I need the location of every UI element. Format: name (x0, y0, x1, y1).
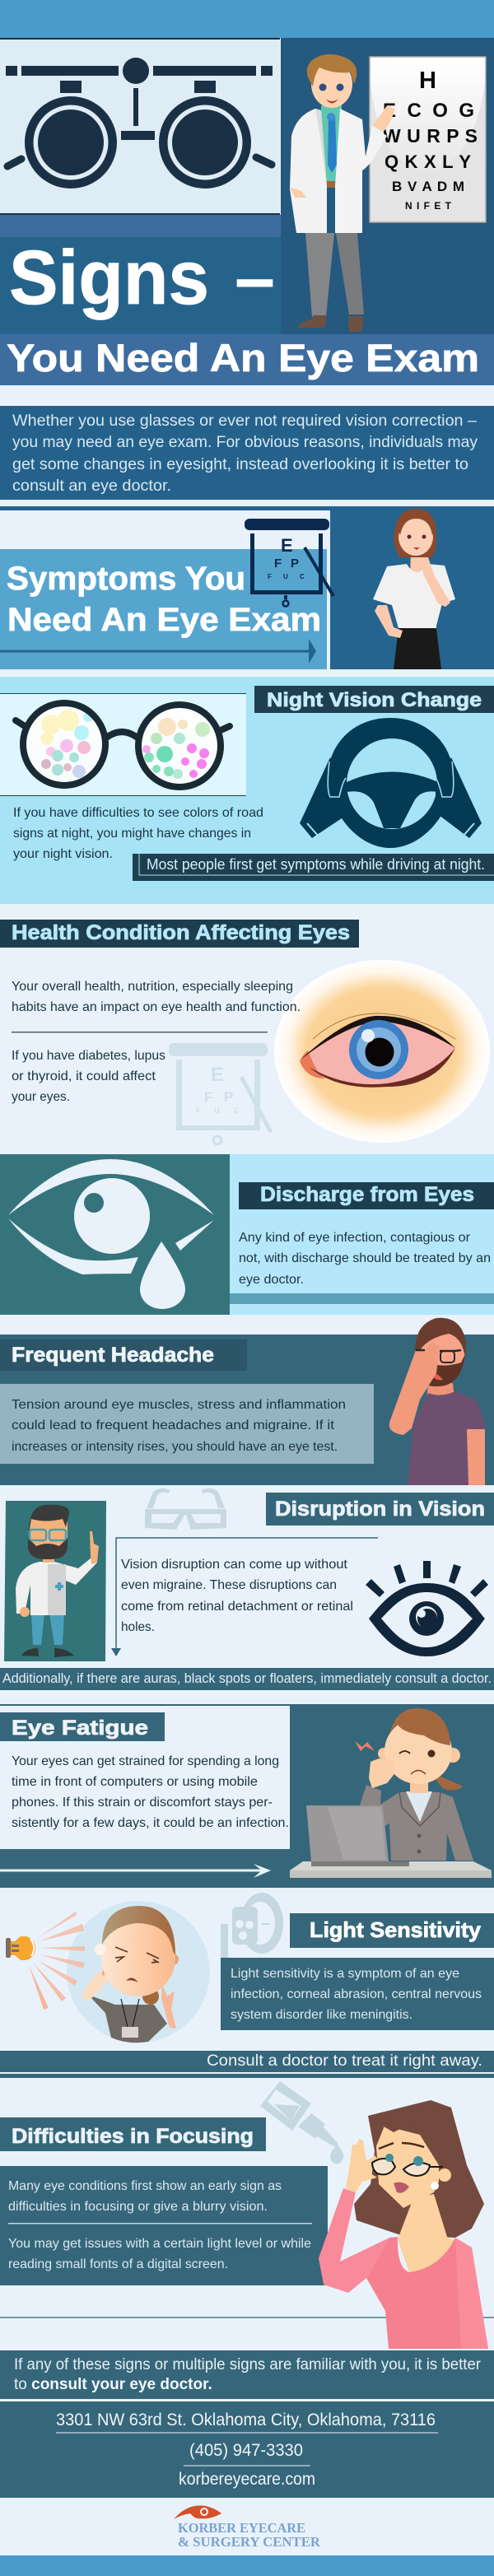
illustration: worried woman (373, 509, 455, 669)
heading text: Need An Eye Exam (7, 602, 321, 638)
body text: your night vision. (13, 847, 113, 861)
icon: eye chart: N I F E T (405, 200, 452, 212)
text block: holes. (121, 1620, 155, 1634)
heading (0, 2117, 266, 2151)
illustration: man with headache (389, 1318, 485, 1485)
panel: health condition (0, 920, 490, 1144)
heading: Difficulties in Focusing (12, 2125, 254, 2148)
text block: Your overall health, nutrition, especially sleeping (12, 980, 293, 994)
illustration: woman squinting at lamp (6, 1901, 210, 2043)
illustration: doctor with beard (4, 1501, 106, 1661)
icon: eye chart: Q K X L Y (384, 151, 471, 172)
icon: eye with lashes (366, 1561, 488, 1656)
text block: Any kind of eye infection, contagious or (239, 1231, 471, 1245)
icon: chart with pointer (245, 519, 333, 606)
intro text (0, 406, 494, 500)
icon: eye chart: H (419, 68, 436, 94)
text block: Tension around eye muscles, stress and inflammation (12, 1398, 346, 1412)
text block: habits have an impact on eye health and function. (12, 1000, 301, 1014)
panel: frequent headache (0, 1318, 494, 1485)
heading text: Symptoms You (7, 561, 245, 597)
intro text: get some changes in eyesight, instead overlooking it is better to (12, 455, 468, 473)
arrow (0, 1864, 271, 1878)
logo: KORBER EYECARE (178, 2520, 305, 2536)
text block: could lead to frequent headaches and migraine. If it (12, 1418, 335, 1432)
text block: or thyroid, it could affect (12, 1069, 156, 1083)
panel: closing message: to consult your eye doctor. (14, 2376, 212, 2393)
intro text: Whether you use glasses or ever not required vision correction – (12, 412, 477, 430)
icon: chart watermark: U (214, 1106, 219, 1115)
panel: discharge from eyes (0, 1154, 494, 1315)
panel: night vision change (0, 669, 494, 904)
illustration: woman at laptop (290, 1708, 492, 1878)
icon: chart with pointer: F (274, 557, 282, 571)
heading: Disruption in Vision (275, 1498, 485, 1521)
panel: closing message: If any of these signs or multiple signs are familiar with you, it is better (14, 2356, 482, 2373)
heading (266, 1493, 494, 1526)
callout band (0, 2051, 494, 2078)
intro text: consult an eye doctor. (12, 477, 171, 495)
arrow (0, 639, 316, 664)
heading text (7, 561, 321, 638)
text block: your eyes. (12, 1090, 70, 1104)
heading: Frequent Headache (12, 1344, 214, 1367)
text block: system disorder like meningitis. (231, 2008, 412, 2022)
text block: Your eyes can get strained for spending a long (12, 1754, 279, 1768)
panel: closing message (0, 2350, 494, 2399)
icon: chart watermark: F (196, 1106, 201, 1115)
text block: come from retinal detachment or retinal (121, 1600, 353, 1614)
panel: glasses background (0, 693, 246, 796)
text block: phones. If this strain or discomfort stays per- (12, 1796, 273, 1810)
bottom band (0, 2555, 494, 2576)
text block (12, 1754, 289, 1830)
heading: Light Sensitivity (310, 1917, 482, 1942)
text block: even migraine. These disruptions can (121, 1578, 337, 1592)
panel: disruption in vision (0, 1488, 494, 1690)
body text: If you have difficulties to see colors of road (13, 806, 263, 820)
icon: eye exam watermark (221, 1893, 283, 1958)
text block: Light sensitivity is a symptom of an eye (231, 1967, 459, 1981)
icon: eye chart: B V A D M (392, 179, 464, 194)
icon: chart with pointer: C (300, 573, 305, 580)
panel: contact details: (405) 947-3330 (189, 2441, 303, 2460)
heading: Health Condition Affecting Eyes (12, 921, 350, 944)
text block: reading small fonts of a digital screen. (8, 2257, 228, 2271)
icon: eye chart: W U R P S (383, 125, 478, 147)
callout: Most people first get symptoms while driving at night. (147, 856, 485, 873)
text block (0, 2166, 328, 2285)
illustration: woman with glasses (319, 2100, 488, 2349)
panel: hero header (0, 38, 494, 334)
heading: Eye Fatigue (12, 1717, 148, 1740)
panel: contact details (0, 2401, 494, 2498)
title band: You Need An Eye Exam (7, 336, 479, 380)
heading (290, 1913, 494, 1948)
icon: steering wheel with hands (300, 718, 482, 848)
icon: trial lens frame (6, 58, 273, 189)
icon: tearing eye (8, 1159, 214, 1309)
text block: eye doctor. (239, 1273, 304, 1287)
panel: eye fatigue (0, 1704, 494, 1888)
text block: You may get issues with a certain light level or while (8, 2237, 311, 2251)
text block: increases or intensity rises, you should have an eye test. (12, 1440, 338, 1454)
icon: chart watermark (169, 1043, 271, 1144)
heading: Night Vision Change (267, 689, 482, 711)
icon: chart with pointer: U (283, 573, 288, 580)
callout (133, 854, 494, 881)
heading (0, 1712, 165, 1741)
text block (0, 1384, 374, 1464)
icon: chart watermark: F (204, 1089, 212, 1105)
icon: eye chart: E C O G (383, 100, 474, 122)
title: Signs: Signs (9, 235, 209, 320)
text block: not, with discharge should be treated by an (239, 1251, 491, 1265)
icon: eye dropper watermark (260, 2081, 343, 2164)
body text (13, 806, 263, 861)
heading (254, 686, 494, 713)
icon: chart with pointer: E (281, 535, 293, 556)
text block: difficulties in focusing or give a blurry vision. (8, 2200, 268, 2214)
panel: difficulties in focusing (0, 2081, 494, 2349)
text block (239, 1231, 491, 1287)
heading: Discharge from Eyes (260, 1183, 474, 1206)
arrow: down (111, 1538, 378, 1656)
intro text: you may need an eye exam. For obvious reasons, individuals may (12, 433, 478, 451)
text block (121, 1558, 353, 1634)
text block: infection, corneal abrasion, central nervous (231, 1987, 482, 2001)
icon: chart watermark: P (224, 1089, 233, 1105)
icon: chart with pointer: F (268, 573, 272, 580)
panel: contact details: 3301 NW 63rd St. Oklahoma City, Oklahoma, 73116 (56, 2411, 436, 2429)
panel: contact details: korbereyecare.com (179, 2470, 315, 2489)
illustration: doctor (290, 54, 395, 332)
text block: Many eye conditions first show an early sign as (8, 2179, 282, 2193)
body text: signs at night, you might have changes in (13, 827, 251, 841)
panel: symptoms heading (0, 500, 494, 669)
logo (174, 2505, 321, 2550)
heading (0, 1339, 247, 1371)
icon: chart watermark: C (234, 1106, 240, 1115)
text block (12, 980, 301, 1104)
callout band: Consult a doctor to treat it right away. (207, 2052, 482, 2070)
icon: eye chart (370, 57, 486, 222)
panel: light sensitivity (0, 1893, 494, 2078)
text block: If you have diabetes, lupus (12, 1049, 165, 1063)
text block: Vision disruption can come up without (121, 1558, 348, 1572)
icon: chart with pointer: P (291, 557, 299, 571)
logo: & SURGERY CENTER (178, 2534, 321, 2550)
illustration: red eye (274, 960, 490, 1143)
icon: colorblind glasses (16, 703, 230, 787)
heading (239, 1182, 494, 1209)
top band (0, 0, 494, 38)
icon: glasses watermark (145, 1488, 226, 1530)
text block (221, 1958, 494, 2030)
text block: time in front of computers or using mobile (12, 1775, 258, 1789)
icon: chart watermark: E (211, 1064, 224, 1086)
text block: sistently for a few days, it could be an infection. (12, 1816, 289, 1830)
title: dash: – (235, 235, 275, 320)
